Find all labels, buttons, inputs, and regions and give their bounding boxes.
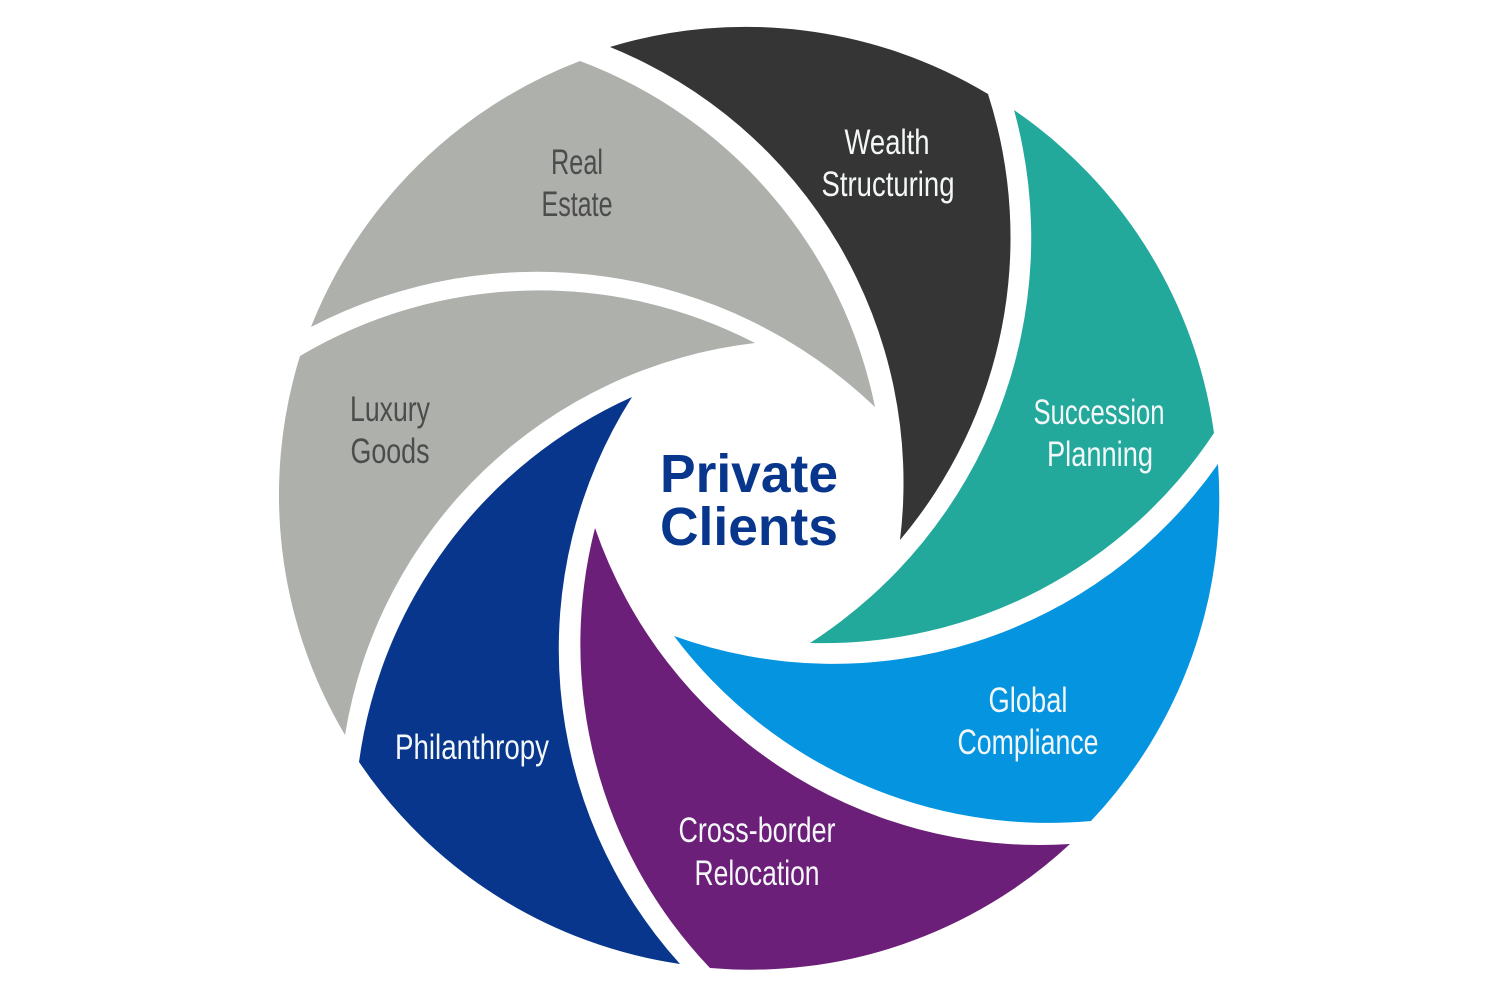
segment: Wealth Structuring xyxy=(610,27,1011,540)
segment: Real Estate xyxy=(311,61,875,407)
segment: Succession Planning: Planning xyxy=(1047,435,1153,474)
segment: Real Estate: Estate xyxy=(542,185,612,224)
segment: Succession Planning xyxy=(810,110,1214,643)
segment: Global Compliance: Global xyxy=(988,681,1068,720)
segment: Philanthropy xyxy=(359,397,680,964)
segment: Global Compliance: Compliance xyxy=(958,723,1098,762)
segment: Luxury Goods: Luxury xyxy=(350,390,430,429)
segment: Luxury Goods: Goods xyxy=(350,432,430,471)
segment: Luxury Goods xyxy=(279,290,755,735)
segment: Cross-border Relocation xyxy=(580,528,1070,970)
segment: Wealth Structuring: Wealth xyxy=(844,123,930,162)
segment: Wealth Structuring: Structuring xyxy=(822,165,954,204)
segment: Global Compliance xyxy=(674,464,1219,823)
segment: Philanthropy: Philanthropy xyxy=(395,728,549,767)
segment: Real Estate: Real xyxy=(551,143,603,182)
segment: Cross-border Relocation: Cross-border xyxy=(678,811,836,850)
center title: Clients xyxy=(660,498,838,557)
segment: Cross-border Relocation: Relocation xyxy=(694,854,820,893)
segment: Succession Planning: Succession xyxy=(1034,393,1164,432)
center title xyxy=(660,445,838,557)
center title: Private xyxy=(660,445,838,504)
